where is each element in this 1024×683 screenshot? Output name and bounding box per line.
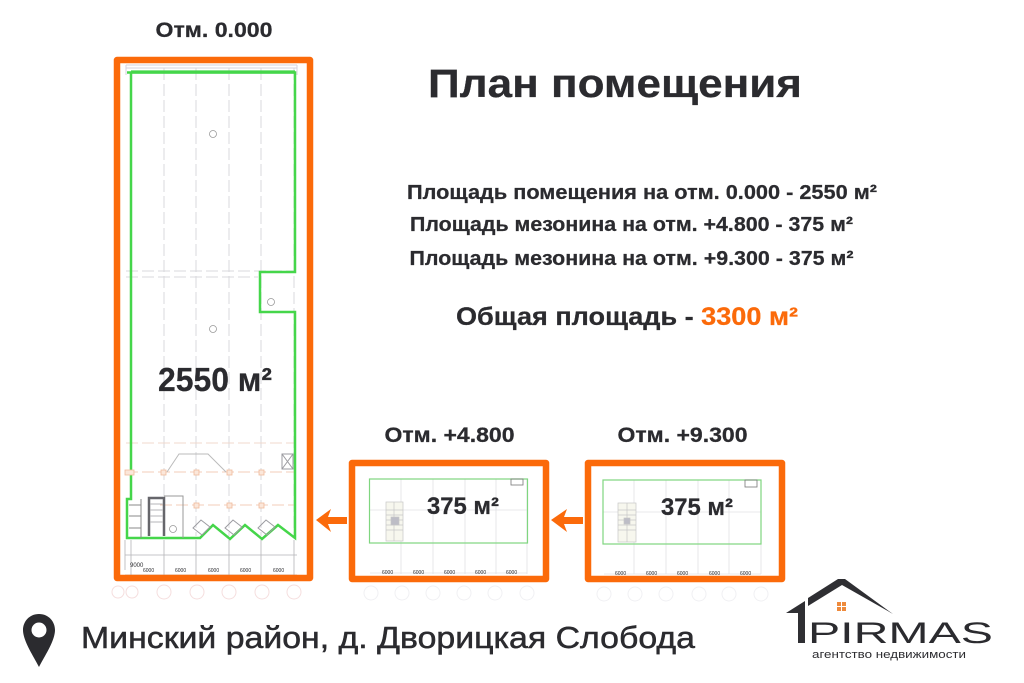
- level label +9.300: Отм. +9.300: [618, 424, 748, 447]
- level label 0.000: Отм. 0.000: [156, 19, 272, 42]
- dimension labels: 6000: [175, 568, 186, 574]
- title: План помещения: [428, 62, 802, 106]
- logo tagline: агентство недвижимости: [812, 649, 966, 661]
- dimensions: [382, 570, 517, 576]
- area breakdown text: Площадь помещения на отм. 0.000 - 2550 м²: [407, 182, 877, 204]
- dimensions: 6000: [615, 571, 626, 577]
- area label 375: 375 м²: [661, 494, 733, 521]
- arrow: mezzanine 4.800 to ground floor: [316, 509, 347, 532]
- logo roof and figure one: [786, 579, 893, 643]
- dimension labels: 6000: [208, 568, 219, 574]
- area label 375: 375 м²: [427, 493, 499, 520]
- green outline: [603, 480, 761, 544]
- room markers: [170, 130, 274, 532]
- main floor plan at level 0.000: [112, 19, 310, 599]
- dimensions: 6000: [475, 570, 486, 576]
- truck dock diagrams: [167, 454, 293, 535]
- area label 2550: 2550 м²: [158, 361, 272, 398]
- green outline: ground floor: [127, 72, 295, 539]
- staircase block: [129, 496, 183, 538]
- orange frame: [117, 60, 310, 578]
- total area: Общая площадь - 3300 м²: [456, 303, 798, 331]
- dimension labels: 6000: [240, 568, 251, 574]
- logo wordmark: PIRMAS: [808, 617, 993, 650]
- area breakdown text: Площадь мезонина на отм. +4.800 - 375 м²: [410, 214, 853, 236]
- dimension labels: 6000: [273, 568, 284, 574]
- level label +4.800: Отм. +4.800: [384, 424, 514, 447]
- orange frame: [352, 463, 546, 579]
- axis bubbles: [364, 586, 534, 600]
- dimensions: 6000: [677, 571, 688, 577]
- column markers: [125, 470, 264, 508]
- mezzanine plan at +9.300: [588, 424, 782, 601]
- logo: PIRMAS: [786, 579, 993, 661]
- axis bubbles: [112, 585, 301, 599]
- logo window: [837, 602, 846, 611]
- area breakdown text: [407, 182, 877, 270]
- dimension labels: 6000: [143, 568, 154, 574]
- dimensions: 6000: [413, 570, 424, 576]
- mezzanine plan at +4.800: [352, 424, 546, 600]
- green outline: [370, 479, 528, 543]
- dimensions: [615, 571, 751, 577]
- dimensions: 6000: [709, 571, 720, 577]
- dimension labels: [130, 563, 284, 574]
- orange frame: [588, 463, 782, 579]
- stair cell: [386, 502, 403, 541]
- dimensions: 6000: [740, 571, 751, 577]
- dimension labels: 9000: [130, 563, 144, 569]
- lower dimension lines: [125, 540, 297, 575]
- area breakdown text: Площадь мезонина на отм. +9.300 - 375 м²: [410, 248, 854, 270]
- arrow: mezzanine 9.300 to 4.800: [551, 509, 583, 532]
- stair cell: [618, 503, 636, 542]
- axis bubbles: [597, 587, 768, 601]
- dimensions: 6000: [444, 570, 455, 576]
- dimensions: 6000: [382, 570, 393, 576]
- icon: location pin: [23, 614, 55, 667]
- dimensions: 6000: [646, 571, 657, 577]
- dimensions: 6000: [506, 570, 517, 576]
- address: Минский район, д. Дворицкая Слобода: [81, 620, 696, 655]
